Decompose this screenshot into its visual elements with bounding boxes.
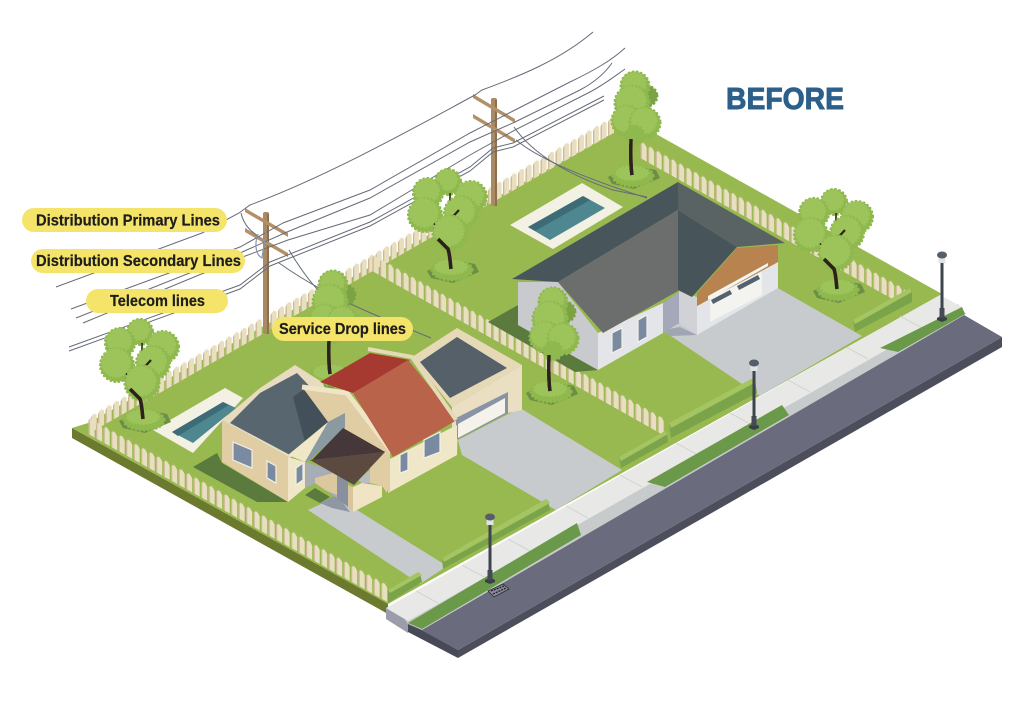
driveway house 2 <box>662 287 862 396</box>
street lamp middle <box>749 360 759 430</box>
right roof slope <box>678 210 737 297</box>
verge planting strip 3 <box>880 307 965 352</box>
gable siding <box>697 245 778 306</box>
back roof slope <box>512 182 678 282</box>
side wall <box>518 282 598 370</box>
utility pole left <box>245 208 288 334</box>
left block wall <box>222 420 288 502</box>
entry shadow <box>663 327 697 336</box>
front left fence <box>88 416 388 602</box>
left roof trim <box>222 365 338 458</box>
front roof slope <box>558 210 678 333</box>
center window small <box>400 451 408 473</box>
side window <box>296 463 303 485</box>
garage wall <box>452 365 522 455</box>
garage roof <box>420 337 507 398</box>
garage door <box>710 272 762 322</box>
window left <box>612 328 622 353</box>
tree by house 2 <box>526 288 578 405</box>
entry ground shadow <box>305 488 330 503</box>
entry pillar <box>679 291 697 335</box>
label: distribution secondary lines <box>31 249 245 273</box>
red roof back <box>320 353 410 393</box>
tree front yard left <box>100 320 178 433</box>
ground shadow <box>488 305 598 372</box>
back fence <box>90 115 614 433</box>
tree behind house 1 <box>306 271 358 388</box>
porch roof light <box>310 452 385 485</box>
gable trim <box>302 387 392 452</box>
pool front yard <box>153 388 243 453</box>
entry door <box>663 292 679 333</box>
garage trim <box>412 328 522 407</box>
utility pole right <box>473 94 515 206</box>
house 2 <box>488 182 785 372</box>
left ground shadow <box>193 453 288 502</box>
tree right side <box>794 190 872 303</box>
overhead wires <box>56 32 647 351</box>
street lamp right <box>937 252 947 322</box>
hedge B <box>442 499 550 569</box>
garage trim <box>708 263 768 300</box>
left window large <box>233 442 252 468</box>
storm drain <box>488 584 509 597</box>
walkway house 1 <box>308 497 447 584</box>
label: distribution primary lines <box>22 208 227 232</box>
divider fence <box>372 253 665 436</box>
right fence <box>640 140 905 306</box>
fascia triangle <box>288 422 328 462</box>
hedge E <box>853 288 912 332</box>
garage wall <box>697 262 778 335</box>
label: distribution secondary lines: Distribution Secondary Lines <box>36 253 241 270</box>
ground lawn <box>72 125 942 614</box>
roof valley <box>293 390 338 442</box>
right back roof slope <box>678 182 785 247</box>
gable wall <box>303 388 390 493</box>
pool back yard <box>510 183 623 249</box>
garage windows <box>712 277 759 302</box>
walkway shadow <box>320 495 350 512</box>
verge planting strip 1 <box>408 523 581 629</box>
red roof front <box>353 360 457 457</box>
label: telecom lines: Telecom lines <box>110 293 205 310</box>
garage gable edge <box>368 349 456 420</box>
label: telecom lines <box>86 289 228 313</box>
left window small <box>267 461 276 483</box>
driveway house 1 <box>458 408 622 510</box>
tree back corner <box>608 72 660 189</box>
left slate roof <box>230 373 337 455</box>
hedge D <box>669 378 757 438</box>
center right wall <box>388 425 457 493</box>
porch interior <box>305 450 387 512</box>
label: service drop lines <box>272 317 413 341</box>
front wall <box>598 303 663 370</box>
center window large <box>424 432 440 458</box>
hedge C <box>619 431 668 468</box>
gable side panel <box>305 413 345 462</box>
verge planting strip 2 <box>647 405 789 487</box>
tree back yard <box>408 170 486 283</box>
label: distribution primary lines: Distribution Primary Lines <box>36 212 220 230</box>
hedge A <box>388 572 422 603</box>
left block side wall <box>288 457 305 502</box>
label: service drop lines: Service Drop lines <box>279 321 406 338</box>
garage door <box>456 392 508 440</box>
street lamp left <box>485 514 495 584</box>
house 1 <box>193 328 522 512</box>
road <box>408 315 1002 658</box>
sidewalk and verge <box>386 295 966 633</box>
title: BEFORE <box>726 82 844 116</box>
porch roof dark <box>312 428 385 460</box>
window right <box>638 315 647 342</box>
